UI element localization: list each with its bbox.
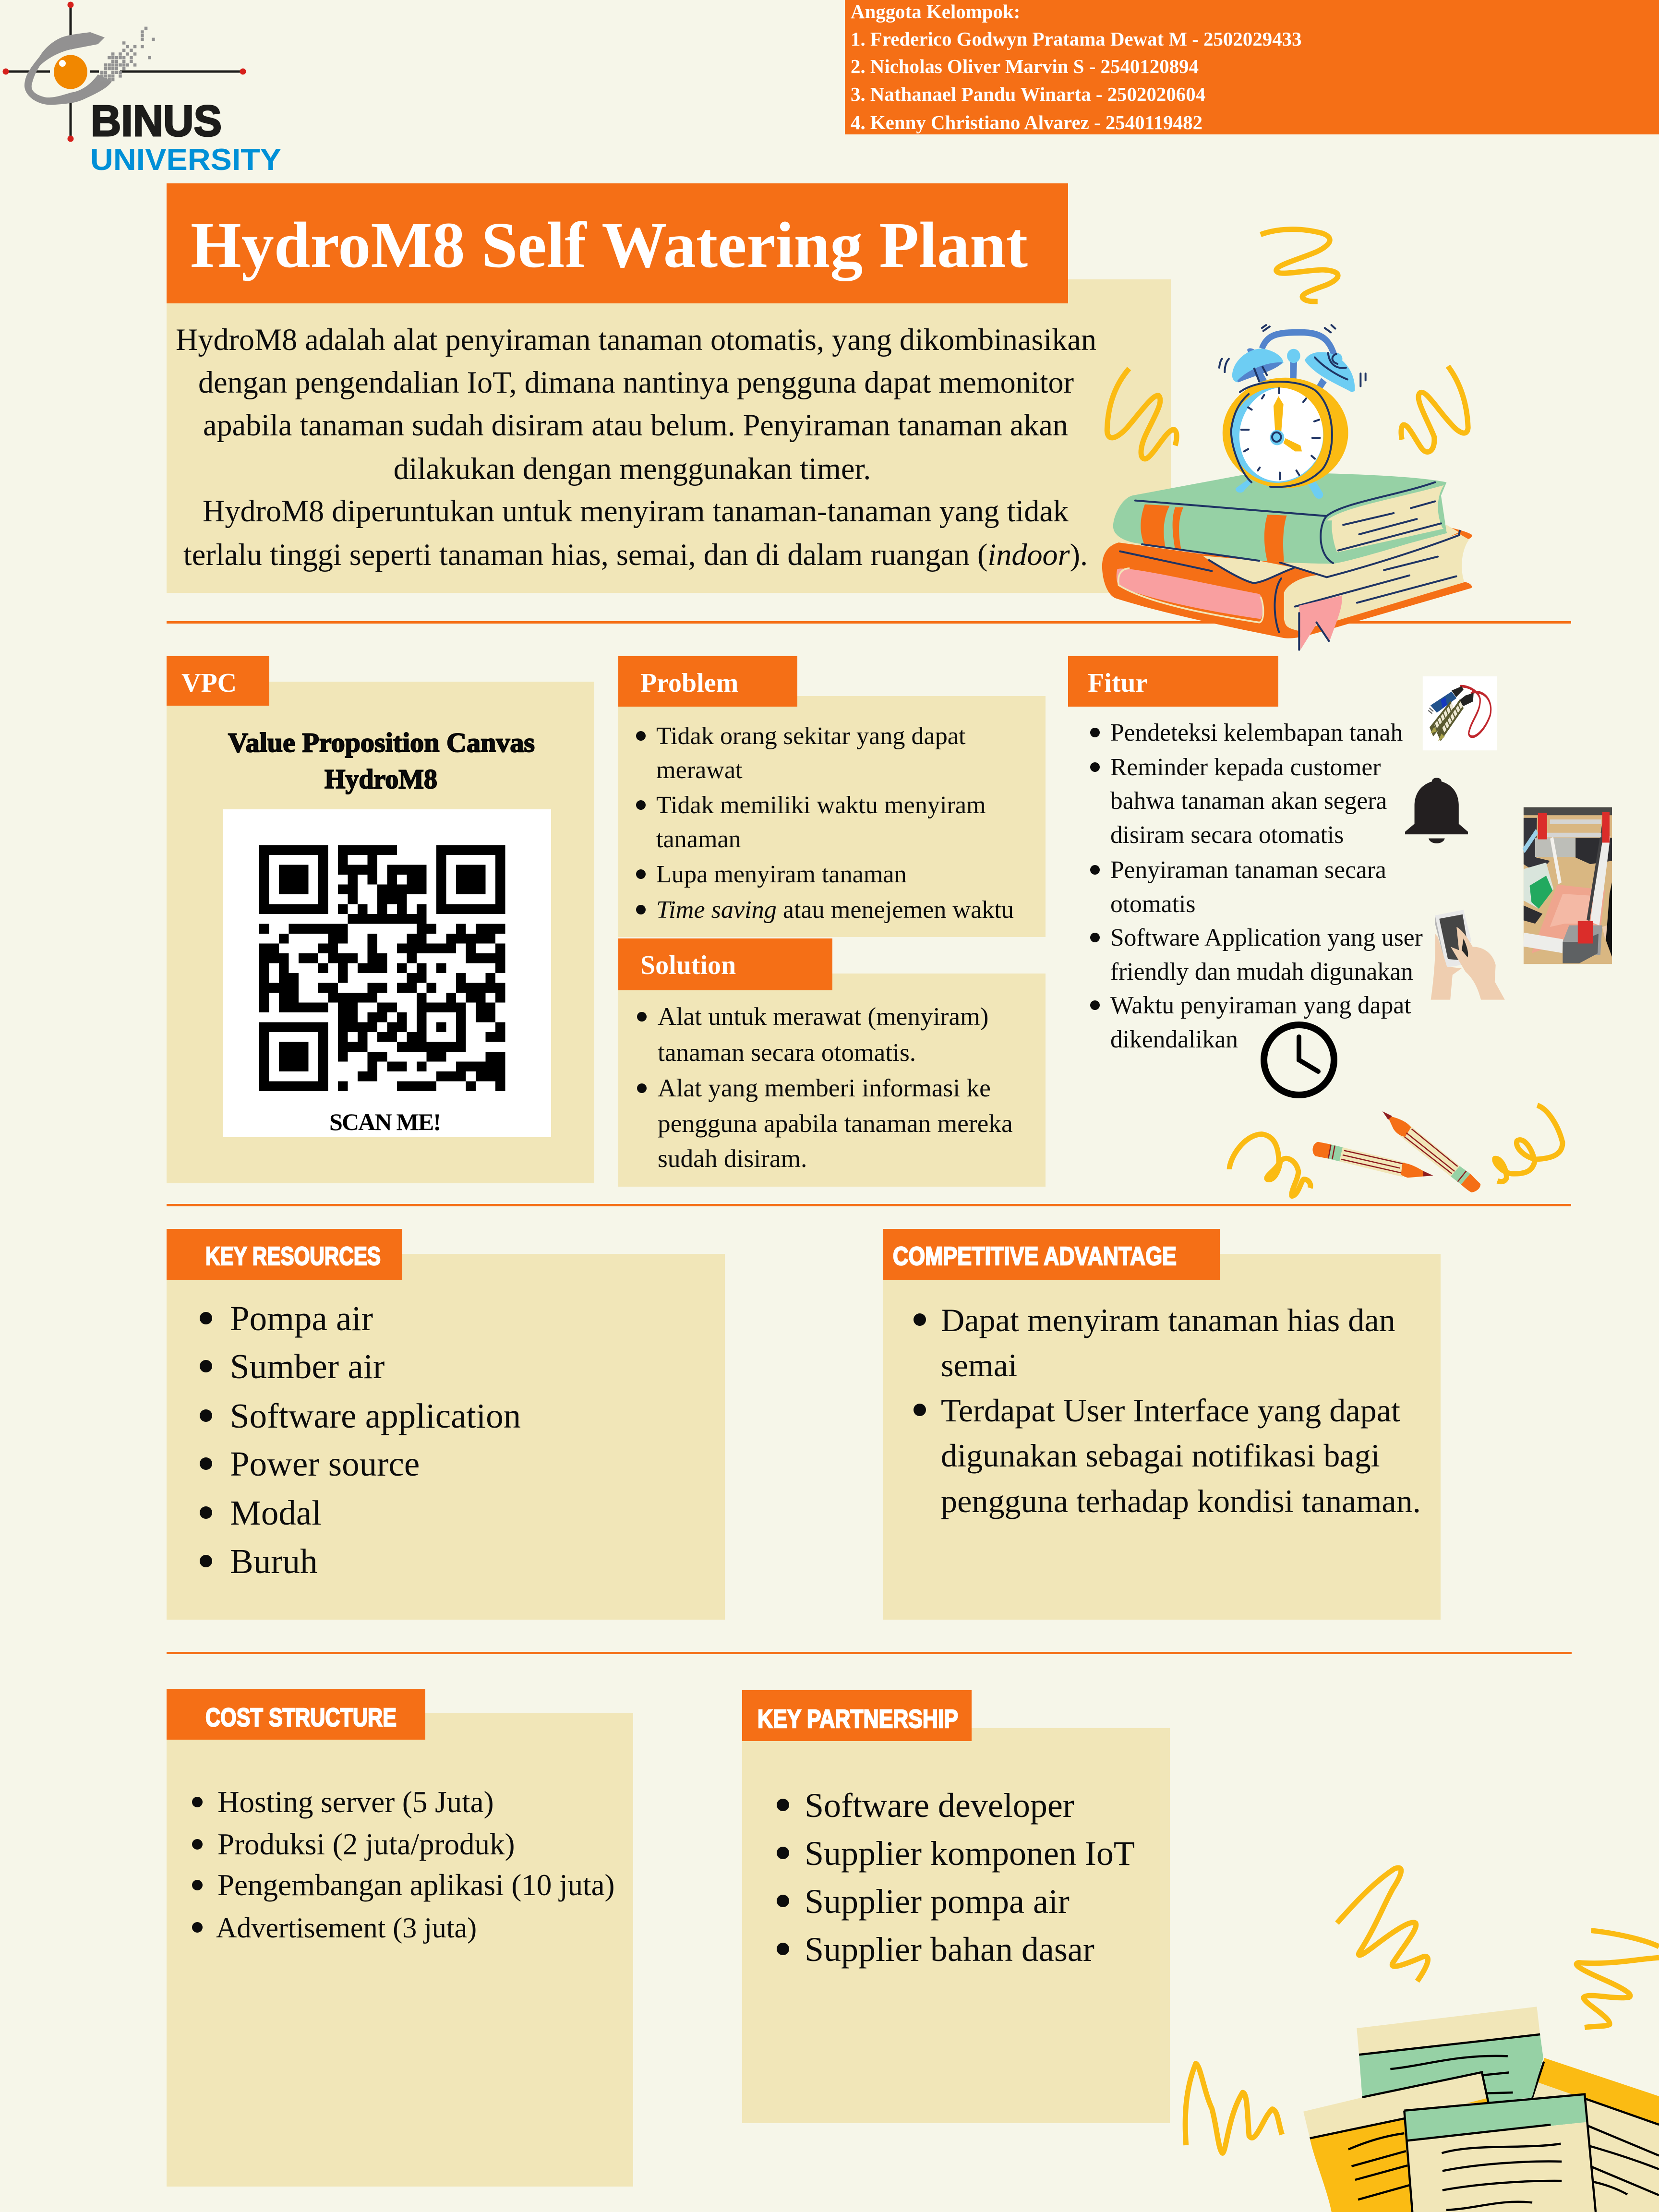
bullets: resources: Sumber air	[230, 1347, 385, 1386]
pencil: right	[1382, 1111, 1480, 1192]
tab: Key Resources	[167, 1229, 402, 1280]
illustration: pencils and scribbles	[1229, 1106, 1563, 1196]
panel: Key Partnership	[742, 1690, 1170, 2123]
tab: Key Partnership: KEY PARTNERSHIP	[757, 1705, 958, 1733]
bullets: feature list: dikendalikan	[1110, 1026, 1238, 1053]
bullets: partners: Software developer	[805, 1786, 1074, 1825]
icon: bell	[1405, 778, 1468, 843]
members panel: 3. Nathanael Pandu Winarta - 2502020604	[851, 84, 1205, 105]
tab: Fitur: Fitur	[1088, 668, 1147, 698]
title banner: HydroM8 Self Watering Plant	[191, 209, 1028, 281]
scribble: left	[1107, 369, 1177, 459]
bullets: resources: Modal	[230, 1493, 322, 1532]
bullets: problem list	[636, 722, 1014, 924]
bullets: advantages: Terdapat User Interface yang dapat	[941, 1392, 1400, 1429]
bullets: advantages	[914, 1302, 1421, 1519]
tab: Key Partnership	[742, 1690, 972, 1741]
bullets: advantages: pengguna terhadap kondisi tanaman.	[941, 1483, 1421, 1519]
bullets: partners: Supplier bahan dasar	[805, 1930, 1094, 1969]
logo: BINUS University: BINUS	[91, 97, 222, 145]
bookmark	[1299, 595, 1342, 650]
bullets: problem list: tanaman	[656, 825, 741, 853]
members panel: 1. Frederico Godwyn Pratama Dewat M - 2502029433	[851, 28, 1302, 50]
alarm clock	[1219, 325, 1366, 499]
tab: VPC: VPC	[181, 668, 237, 698]
icon group: feature images	[1405, 676, 1612, 1000]
tab: VPC	[167, 656, 269, 706]
heading: value proposition canvas: HydroM8	[325, 764, 437, 794]
scribble: top	[1261, 229, 1338, 301]
bullets: feature list: otomatis	[1110, 890, 1195, 918]
bullets: feature list: bahwa tanaman akan segera	[1110, 787, 1387, 815]
bullets: resources: Buruh	[230, 1542, 318, 1581]
tab: Competitive Advantage: COMPETITIVE ADVANTAGE	[893, 1242, 1177, 1271]
tab: Problem	[618, 656, 797, 707]
bullets: problem list: Lupa menyiram tanaman	[656, 860, 907, 888]
tab: Problem: Problem	[640, 668, 738, 698]
bullets: problem list: Time saving atau menejemen waktu	[656, 896, 1014, 924]
sheet: middle	[1303, 2072, 1488, 2212]
image: prototype photo	[1524, 807, 1612, 964]
pencil: left	[1312, 1142, 1433, 1178]
panel: intro description: apabila tanaman sudah disiram atau belum. Penyiraman tanaman akan	[203, 408, 1068, 442]
scribble: left	[1229, 1134, 1310, 1196]
scribble: left	[1185, 2064, 1282, 2153]
logo: BINUS University	[3, 2, 281, 177]
members panel	[845, 0, 1659, 134]
section: Fitur	[1068, 656, 1423, 1053]
bullets: partners	[777, 1786, 1135, 1969]
bullets: solution list: pengguna apabila tanaman mereka	[658, 1109, 1013, 1138]
tab: Solution: Solution	[640, 950, 736, 980]
bullets: problem list: Tidak orang sekitar yang dapat	[656, 722, 966, 750]
bullets: solution list: Alat yang memberi informasi ke	[658, 1073, 991, 1102]
illustration: alarm clock on books	[1102, 229, 1472, 650]
scribble: right	[1495, 1106, 1563, 1182]
members panel: Anggota Kelompok:	[851, 1, 1020, 23]
scribble: centre	[1337, 1868, 1428, 1981]
heading: value proposition canvas: Value Proposition Canvas	[228, 728, 535, 758]
tab: Fitur	[1068, 656, 1278, 707]
panel: Solution	[618, 938, 1046, 1187]
bullets: feature list: Reminder kepada customer	[1110, 754, 1381, 781]
sheet: right	[1532, 2058, 1659, 2212]
bullets: solution list	[637, 1002, 1013, 1173]
bullets: resources	[200, 1299, 521, 1581]
bullets: resources: Software application	[230, 1396, 521, 1435]
upper green book	[1113, 473, 1447, 564]
scribble: right	[1576, 1931, 1659, 2028]
bullets: costs: Produksi (2 juta/produk)	[217, 1827, 515, 1861]
bullets: feature list	[1090, 719, 1423, 1053]
tab: Cost Structure: COST STRUCTURE	[205, 1703, 397, 1732]
bullets: resources: Pompa air	[230, 1299, 373, 1338]
bullets: costs: Hosting server (5 Juta)	[217, 1785, 494, 1819]
bullets: feature list: disiram secara otomatis	[1110, 821, 1344, 849]
bullets: advantages: semai	[941, 1347, 1017, 1383]
scribble: right	[1401, 366, 1468, 452]
bullets: resources: Power source	[230, 1444, 420, 1483]
panel: Cost Structure	[167, 1689, 633, 2187]
bullets: solution list: sudah disiram.	[658, 1144, 807, 1173]
QR code card: SCAN ME!	[329, 1108, 441, 1135]
tab: Solution	[618, 938, 832, 990]
image: soil moisture sensor	[1423, 676, 1497, 750]
panel: intro description: dilakukan dengan menggunakan timer.	[394, 452, 871, 486]
bullets: problem list: Tidak memiliki waktu menyiram	[656, 791, 986, 819]
heading: value proposition canvas	[228, 728, 535, 794]
bullets: feature list: friendly dan mudah digunakan	[1110, 958, 1413, 986]
panel: intro description: terlalu tinggi seperti tanaman hias, semai, dan di dalam ruangan (indoor).	[183, 538, 1088, 572]
QR code card	[223, 809, 551, 1137]
panel: intro description: dengan pengendalian IoT, dimana nantinya pengguna dapat memonitor	[198, 365, 1074, 399]
tab: Key Resources: KEY RESOURCES	[205, 1242, 381, 1271]
bullets: feature list: Software Application yang user	[1110, 924, 1423, 951]
bullets: advantages: Dapat menyiram tanaman hias dan	[941, 1302, 1395, 1338]
icon: hand holding phone	[1431, 910, 1505, 1000]
bullets: solution list: tanaman secara otomatis.	[658, 1038, 916, 1067]
panel: VPC	[167, 656, 594, 1183]
bullets: solution list: Alat untuk merawat (menyiram)	[658, 1002, 988, 1031]
sheet: back	[1357, 2007, 1543, 2103]
bullets: costs: Advertisement (3 juta)	[216, 1912, 477, 1944]
lower orange book	[1102, 525, 1472, 638]
panel: Key Resources	[167, 1229, 725, 1620]
logo: BINUS University: UNIVERSITY	[90, 143, 281, 177]
icon: clock	[1264, 1025, 1334, 1095]
illustration: paper sheets and scribbles	[1185, 1868, 1659, 2212]
bullets: advantages: digunakan sebagai notifikasi bagi	[941, 1437, 1380, 1474]
bullets: problem list: merawat	[656, 756, 743, 784]
panel: Problem	[618, 656, 1046, 937]
panel: intro description: HydroM8 adalah alat penyiraman tanaman otomatis, yang dikombinasikan	[176, 323, 1096, 357]
panel: intro description	[167, 279, 1171, 593]
title banner	[167, 183, 1068, 303]
panel: intro description: HydroM8 diperuntukan untuk menyiram tanaman-tanaman yang tidak	[203, 494, 1069, 528]
bullets: feature list: Waktu penyiraman yang dapat	[1110, 992, 1411, 1019]
bullets: feature list: Pendeteksi kelembapan tanah	[1110, 719, 1403, 746]
panel: Competitive Advantage	[883, 1229, 1441, 1620]
bullets: partners: Supplier komponen IoT	[805, 1834, 1135, 1873]
sheet: front	[1404, 2094, 1596, 2212]
members panel: 2. Nicholas Oliver Marvin S - 2540120894	[851, 56, 1199, 77]
bullets: costs: Pengembangan aplikasi (10 juta)	[217, 1868, 615, 1902]
bullets: feature list: Penyiraman tanaman secara	[1110, 856, 1386, 884]
members panel: 4. Kenny Christiano Alvarez - 2540119482	[851, 112, 1202, 133]
bullets: costs	[192, 1785, 615, 1944]
tab: Cost Structure	[167, 1689, 425, 1740]
tab: Competitive Advantage	[883, 1229, 1220, 1280]
bullets: partners: Supplier pompa air	[805, 1882, 1070, 1921]
